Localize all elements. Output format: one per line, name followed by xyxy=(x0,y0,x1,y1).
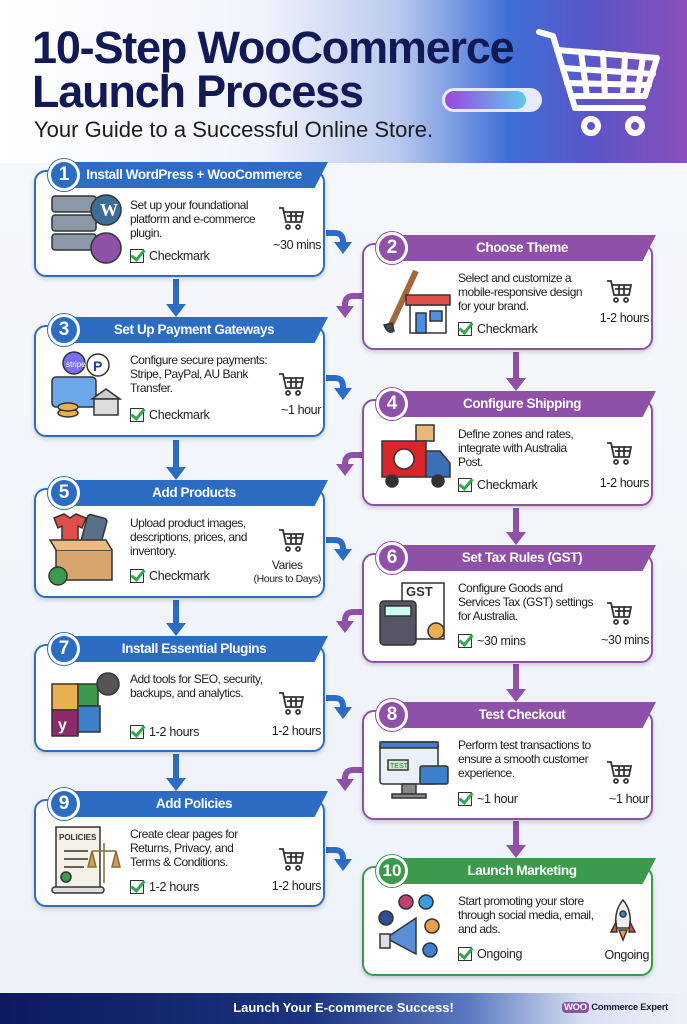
panel: step 7: 1-2 hours xyxy=(272,724,321,738)
icon: cart xyxy=(607,442,632,465)
panel: step 6: Set Tax Rules (GST) xyxy=(462,550,582,565)
panel: step 8: Perform test transactions to ensure a smooth customer experience. xyxy=(458,738,591,780)
panel: step 8: ~1 hour xyxy=(609,792,649,806)
panel: step 5: Varies xyxy=(272,558,303,572)
panel: step 7: 1-2 hours xyxy=(149,725,199,739)
panel: step 5: Add Products xyxy=(152,485,236,500)
panel: step 4: Configure Shipping xyxy=(463,396,581,411)
icon: payments: stripe xyxy=(66,360,86,369)
panel: step 7 xyxy=(32,632,328,756)
icon: server wordpress: W xyxy=(100,200,118,220)
panel: step 3: 3 xyxy=(59,319,69,340)
panel: step 3: Configure secure payments: Stripe, PayPal, AU Bank Transfer. xyxy=(130,353,267,395)
panel: step 4: Checkmark xyxy=(477,478,538,492)
panel: step 5: Checkmark xyxy=(149,569,210,583)
panel: step 10: 10 xyxy=(383,861,401,880)
icon: cart xyxy=(279,529,304,552)
icon: rocket xyxy=(610,899,636,942)
icon: cart xyxy=(279,373,304,396)
icon: GST calculator xyxy=(379,582,445,646)
panel: step 5: 5 xyxy=(59,482,69,503)
panel: step 5: (Hours to Days) xyxy=(253,573,321,585)
panel: step 2: 1-2 hours xyxy=(600,311,649,325)
icon: monitor checkout: TEST xyxy=(390,763,409,770)
panel: step 9: 9 xyxy=(59,793,69,814)
icon: cart xyxy=(607,761,632,784)
icon: delivery truck xyxy=(381,424,451,488)
icon: progress bar xyxy=(442,88,542,112)
panel: step 10: Ongoing xyxy=(605,948,649,962)
footer xyxy=(0,993,687,1024)
title xyxy=(32,22,514,117)
panel: step 4 xyxy=(360,387,656,510)
icon: cart xyxy=(279,207,304,230)
panel: step 1: ~30 mins xyxy=(273,238,321,252)
icon: cart xyxy=(607,280,632,303)
panel: step 9: Create clear pages for Returns, Privacy, and Terms & Conditions. xyxy=(130,827,238,869)
icon: brush and shop xyxy=(383,270,451,334)
panel: step 2: 2 xyxy=(387,237,397,258)
footer tagline: Launch Your E-commerce Success! xyxy=(233,1000,454,1015)
panel: step 5: Upload product images, descriptions, prices, and inventory. xyxy=(130,516,247,558)
icon: product box xyxy=(48,513,113,586)
panel: step 6: ~30 mins xyxy=(477,634,526,648)
panel: step 9: Add Policies xyxy=(156,796,232,811)
icon: cart xyxy=(279,692,304,715)
panel: step 3: Set Up Payment Gateways xyxy=(114,322,274,337)
panel: step 4: Define zones and rates, integrate with Australia Post. xyxy=(458,427,573,469)
panel: step 3: ~1 hour xyxy=(281,403,321,417)
panel: step 7: Install Essential Plugins xyxy=(122,641,266,656)
panel: step 3: Checkmark xyxy=(149,408,210,422)
header background xyxy=(0,0,687,163)
icon: policies document xyxy=(51,826,121,894)
panel: step 9: 1-2 hours xyxy=(149,880,199,894)
panel: step 4: 4 xyxy=(387,393,397,414)
panel: step 7: 7 xyxy=(59,638,69,659)
icon: payments xyxy=(51,351,122,418)
panel: step 9 xyxy=(32,787,328,911)
panel: step 6: 6 xyxy=(387,547,397,568)
icon: monitor checkout xyxy=(379,741,449,799)
icon: payments: P xyxy=(93,358,102,374)
panel: step 8 xyxy=(360,698,656,824)
panel: step 1: Set up your foundational platform and e-commerce plugin. xyxy=(130,198,255,240)
panel: step 6: Configure Goods and Services Tax (GST) settings for Australia. xyxy=(458,581,593,623)
subtitle: Your Guide to a Successful Online Store. xyxy=(34,117,433,142)
panel: step 2 xyxy=(360,231,656,354)
panel: step 2: Checkmark xyxy=(477,322,538,336)
panel: step 2: Select and customize a mobile-responsive design for your brand. xyxy=(458,271,582,313)
panel: step 3 xyxy=(32,313,328,441)
panel: step 4: 1-2 hours xyxy=(600,476,649,490)
icon: server wordpress xyxy=(51,194,122,264)
icon: policies document: POLICIES xyxy=(59,833,97,842)
title: Launch Process xyxy=(32,66,363,117)
panel: step 1: Install WordPress + WooCommerce xyxy=(86,167,302,182)
icon: GST calculator: GST xyxy=(406,584,433,599)
icon: plugins puzzle xyxy=(51,672,120,737)
panel: step 10: Start promoting your store through social media, email, and ads. xyxy=(458,894,593,936)
panel: step 9: 1-2 hours xyxy=(272,879,321,893)
panel: step 1 xyxy=(32,158,328,281)
panel: step 2: Choose Theme xyxy=(476,240,568,255)
panel: step 1: 1 xyxy=(59,164,69,185)
icon: megaphone social xyxy=(378,894,440,958)
icon: plugins puzzle: y xyxy=(58,717,67,734)
title: 10-Step WooCommerce xyxy=(32,22,514,73)
panel: step 6: ~30 mins xyxy=(601,633,649,647)
panel: step 10: Ongoing xyxy=(477,947,522,961)
panel: step 5 xyxy=(32,476,328,602)
icon: header cart xyxy=(536,29,660,136)
panel: step 8: 8 xyxy=(387,704,397,725)
panel: step 1: Checkmark xyxy=(149,249,210,263)
panel: step 10 xyxy=(360,854,656,980)
icon: cart xyxy=(607,602,632,625)
panel: step 6 xyxy=(360,541,656,667)
logo: WooCommerce Expert: WOO Commerce Expert xyxy=(564,1002,668,1013)
panel: step 8: Test Checkout xyxy=(479,707,565,722)
icon: cart xyxy=(279,848,304,871)
panel: step 10: Launch Marketing xyxy=(467,863,577,878)
panel: step 7: Add tools for SEO, security, backups, and analytics. xyxy=(130,672,263,700)
panel: step 8: ~1 hour xyxy=(477,792,518,806)
